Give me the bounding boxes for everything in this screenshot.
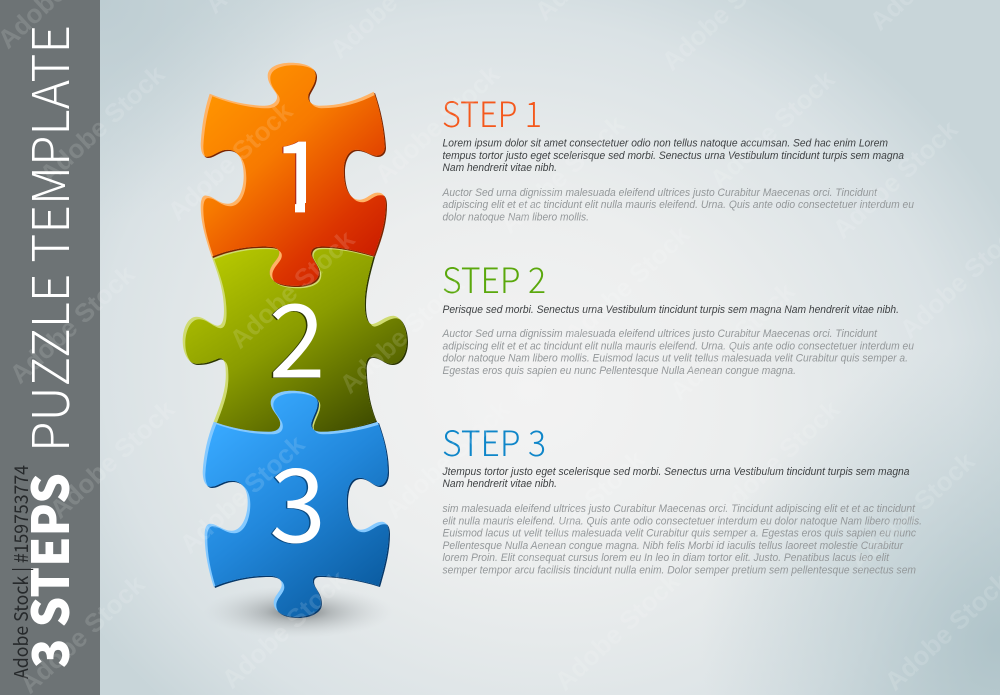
watermark text: Adobe Stock bbox=[224, 224, 361, 354]
number 3: 3 bbox=[269, 425, 326, 572]
step 3 detail text: Euismod lacus ut velit tellus malesuada velit Curabitur quis semper a. Egestas eros quis sapien eu nunc bbox=[442, 528, 917, 540]
number 1 bbox=[282, 142, 306, 212]
step 2 detail text: Egestas eros quis sapien eu nunc Pellentesque Nulla Aenean congue magna. bbox=[442, 365, 796, 377]
step 3 text block bbox=[442, 416, 922, 576]
step 1 heading: STEP 1 bbox=[442, 87, 542, 138]
watermark text: Adobe Stock bbox=[704, 64, 841, 194]
step 3 detail text: lorem Proin. Elit consequat cursus lorem eu In leo in diam tortor elit. Justo. Penatibus lacus leo elit bbox=[442, 552, 890, 564]
watermark text: Adobe Stock bbox=[379, 394, 516, 524]
puzzle piece 3 bbox=[203, 391, 391, 619]
watermark text: Adobe Stock bbox=[4, 259, 141, 389]
sidebar title: 3 steps puzzle template bbox=[10, 25, 84, 668]
step 3 detail text bbox=[442, 503, 922, 576]
sidebar title bold part: 3 STEPS bbox=[10, 473, 84, 668]
step 1 intro text bbox=[442, 138, 904, 174]
step 1 intro text: tempus tortor justo eget scelerisque sed morbi. Senectus urna Vestibulum tincidunt turpis sem magna bbox=[442, 150, 904, 162]
watermark text: Adobe Stock bbox=[216, 564, 353, 694]
step 1 detail text: Auctor Sed urna dignissim malesuada eleifend ultrices justo Curabitur Maecenas orci. Tincidunt bbox=[442, 187, 878, 199]
number 3: 3 bbox=[268, 426, 324, 572]
watermark text: Adobe Stock bbox=[559, 219, 696, 349]
step 2 heading: STEP 2 bbox=[442, 253, 546, 304]
step 2 detail text bbox=[442, 328, 914, 377]
step 3 detail text: elit nulla mauris eleifend. Urna. Quis ante odio consectetuer interdum eu dolor natoque Nam libero mollis. bbox=[442, 516, 922, 528]
step 1 detail text: dolor natoque Nam libero mollis. bbox=[442, 212, 589, 224]
watermark text: Adobe Stock bbox=[162, 96, 299, 226]
step 3 detail text: semper tempor arcu facilisis tincidunt nulla enim. Dolor semper pretium sem pellentesque senectus sem bbox=[442, 564, 916, 576]
watermark text: Adobe Stock bbox=[549, 566, 686, 695]
watermark text: Adobe Stock bbox=[369, 59, 506, 189]
step 2 detail text: dolor natoque Nam libero mollis. Euismod lacus ut velit tellus malesuada velit Curabitur quis semper a. bbox=[442, 352, 908, 364]
puzzle shadow bbox=[203, 586, 393, 638]
number 2: 2 bbox=[267, 261, 324, 408]
watermark text: Adobe Stock bbox=[844, 446, 981, 576]
number 1: 1 bbox=[272, 99, 326, 241]
watermark text: Adobe Stock bbox=[709, 394, 846, 524]
step 1 intro text: Nam hendrerit vitae nibh. bbox=[442, 162, 557, 174]
number 1: 1 bbox=[271, 99, 325, 241]
step 2 intro text: Perisque sed morbi. Senectus urna Vestibulum tincidunt turpis sem magna Nam hendrerit vitae nibh. bbox=[442, 304, 899, 316]
puzzle piece 1 bbox=[201, 63, 388, 288]
step 3 intro text bbox=[442, 466, 910, 490]
step 3 detail text: sim malesuada eleifend ultrices justo Curabitur Maecenas orci. Tincidunt adipiscing elit et et ac tincidunt bbox=[442, 503, 916, 515]
puzzle piece 2 bbox=[183, 247, 409, 434]
watermark text: Adobe Stock bbox=[34, 59, 171, 189]
watermark text: Adobe Stock bbox=[174, 429, 311, 559]
step 1 detail text: adipiscing elit et et ac tincidunt elit nulla mauris eleifend. Urna. Quis ante odio consectetuer interdum eu bbox=[442, 199, 914, 211]
step 3 heading: STEP 3 bbox=[442, 416, 546, 467]
watermark text: Adobe Stock bbox=[494, 109, 631, 239]
watermark text: Adobe Stock bbox=[827, 114, 964, 244]
step 2 detail text: adipiscing elit et et ac tincidunt elit nulla mauris eleifend. Urna. Quis ante odio consectetuer interdum eu bbox=[442, 340, 914, 352]
stock credit: Adobe Stock | #159753774 bbox=[7, 465, 34, 679]
puzzle stack bbox=[183, 63, 409, 619]
step 2 detail text: Auctor Sed urna dignissim malesuada eleifend ultrices justo Curabitur Maecenas orci. Tincidunt bbox=[442, 328, 878, 340]
watermark text: Adobe Stock bbox=[664, 276, 801, 406]
sidebar title light part: PUZZLE TEMPLATE bbox=[10, 25, 84, 452]
step 3 intro text: Nam hendrerit vitae nibh. bbox=[442, 478, 557, 490]
watermark text: Adobe Stock bbox=[334, 269, 471, 399]
step 1 detail text bbox=[442, 187, 914, 224]
sidebar panel bbox=[0, 0, 100, 695]
step 3 intro text: Jtempus tortor justo eget scelerisque sed morbi. Senectus urna Vestibulum tincidunt turpis sem magna bbox=[442, 466, 910, 478]
step 1 intro text: Lorem ipsum dolor sit amet consectetuer odio non tellus natoque accumsan. Sed hac enim Lorem bbox=[442, 138, 888, 150]
step 1 text block bbox=[442, 87, 914, 224]
step 2 text block bbox=[442, 253, 914, 377]
step 3 detail text: Pellentesque Nulla Aenean congue magna. Nibh felis Morbi id iaculis tellus laoreet molestie Curabitur bbox=[442, 540, 903, 552]
number 2: 2 bbox=[269, 260, 325, 408]
watermark text: Adobe Stock bbox=[514, 444, 651, 574]
watermark text: Adobe Stock bbox=[44, 394, 181, 524]
